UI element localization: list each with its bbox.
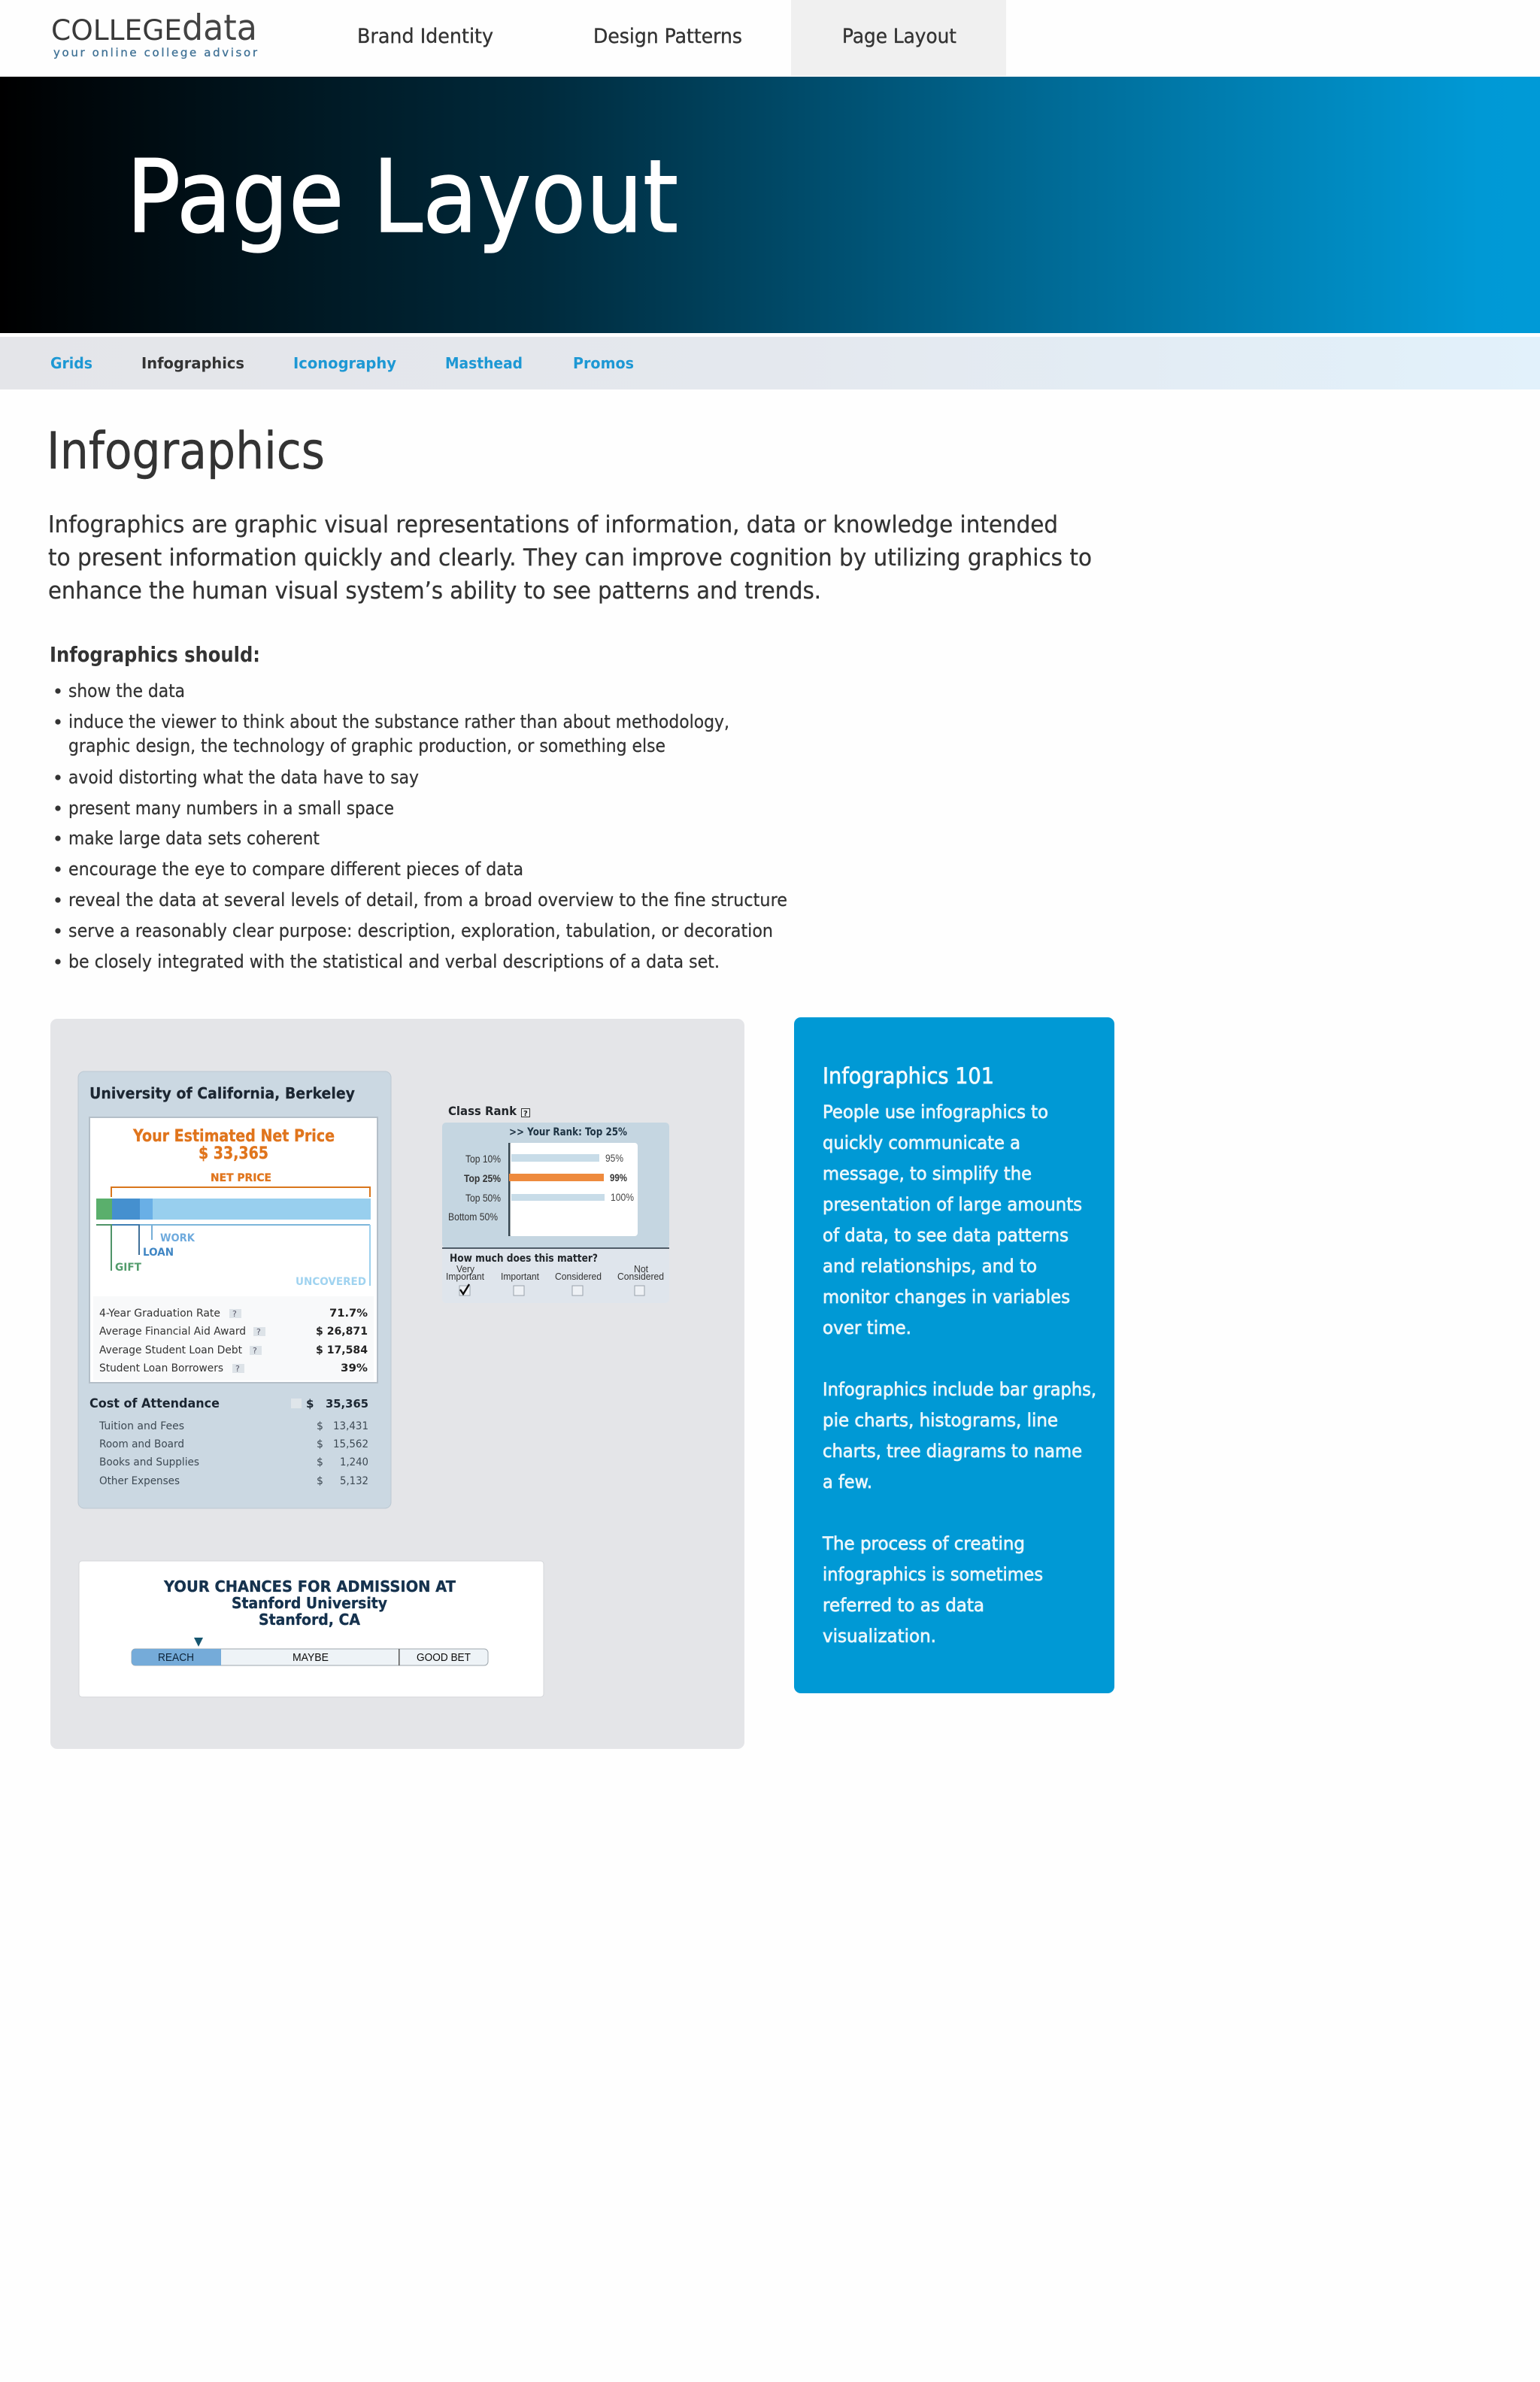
net price headline: Your Estimated Net Price: [132, 1127, 335, 1146]
logo: CollegeData: [51, 8, 258, 59]
admission heading: [163, 1577, 456, 1629]
importance selector: Considered: [555, 1271, 602, 1282]
net price white box: [89, 1117, 377, 1383]
nav item: Brand Identity: Brand Identity: [357, 25, 493, 48]
stacked cost bar: [96, 1199, 371, 1220]
statistics rows: [99, 1308, 368, 1374]
sidebar body text: a few.: [823, 1471, 872, 1493]
cost of attendance table: 1,240: [340, 1456, 368, 1468]
bullet list: present many numbers in a small space: [68, 798, 394, 819]
sidebar body text: Infographics include bar graphs,: [823, 1379, 1096, 1400]
rank labels: Top 25%: [464, 1172, 501, 1184]
statistics rows: $ 26,871: [316, 1326, 368, 1338]
importance selector: How much does this matter?: [450, 1253, 598, 1265]
sidebar heading: Infographics 101: [823, 1063, 994, 1089]
sidebar body text: [822, 1102, 1096, 1647]
sub nav link: Promos: Promos: [573, 354, 634, 372]
cost of attendance table: 35,365: [326, 1397, 368, 1411]
statistics rows: 39%: [341, 1362, 368, 1374]
cost of attendance table: $: [317, 1420, 323, 1432]
sidebar body text: quickly communicate a: [823, 1132, 1020, 1153]
cost of attendance table: $: [317, 1438, 323, 1450]
chances scale bar: GOOD BET: [417, 1651, 471, 1664]
sidebar body text: visualization.: [823, 1626, 936, 1647]
importance selector: Important: [501, 1271, 539, 1282]
help icon: [522, 1108, 529, 1118]
sub nav link: Grids: Grids: [50, 354, 92, 372]
admission heading: Stanford University: [232, 1594, 387, 1612]
admission heading: Stanford, CA: [259, 1611, 360, 1629]
statistics rows: Average Student Loan Debt: [99, 1344, 242, 1356]
sidebar body text: People use infographics to: [823, 1102, 1048, 1123]
bar labels: LOAN: [143, 1247, 174, 1259]
admission heading: YOUR CHANCES FOR ADMISSION AT: [163, 1577, 456, 1596]
intro paragraph: to present information quickly and clearly. They can improve cognition by utilizing graphics to: [48, 544, 1092, 571]
importance selector: Important: [446, 1271, 484, 1282]
hero banner: [0, 77, 1540, 333]
bullet list: encourage the eye to compare different pieces of data: [68, 859, 523, 880]
net price headline: [132, 1127, 335, 1184]
bar labels: [115, 1232, 366, 1288]
cost of attendance table: Cost of Attendance: [89, 1396, 220, 1411]
statistics rows: Average Financial Aid Award: [99, 1326, 246, 1338]
nav item: Page Layout active tab: Page Layout: [842, 25, 956, 48]
sidebar body text: and relationships, and to: [823, 1256, 1037, 1277]
sidebar body text: The process of creating: [822, 1533, 1025, 1554]
rank labels: Bottom 50%: [448, 1211, 498, 1223]
sub navigation bar: [0, 337, 1540, 389]
bar labels: UNCOVERED: [296, 1276, 366, 1288]
bullet list: make large data sets coherent: [68, 828, 320, 849]
bullet list: graphic design, the technology of graphic production, or something else: [68, 735, 665, 756]
cost of attendance table: Tuition and Fees: [99, 1420, 184, 1432]
bullet list: show the data: [68, 680, 185, 702]
pointer arrow: [194, 1638, 203, 1647]
sub nav link: Masthead: Masthead: [445, 354, 523, 372]
bar labels: GIFT: [115, 1262, 141, 1274]
sidebar body text: of data, to see data patterns: [823, 1225, 1069, 1246]
cost of attendance table: 5,132: [340, 1475, 368, 1487]
importance selector: Very: [456, 1263, 474, 1274]
chances scale bar: MAYBE: [293, 1651, 329, 1664]
intro paragraph: enhance the human visual system’s ability to see patterns and trends.: [48, 577, 821, 605]
cost of attendance table: 13,431: [333, 1420, 368, 1432]
statistics rows: ?: [235, 1364, 240, 1374]
chances scale bar: REACH: [158, 1651, 194, 1664]
logo: CollegeData: COLLEGE: [51, 14, 182, 47]
sidebar body text: monitor changes in variables: [823, 1286, 1070, 1308]
header navigation bar: [51, 0, 1006, 76]
rank bar chart: 100%: [611, 1191, 634, 1203]
intro paragraph: [48, 511, 1092, 605]
sub nav link: Infographics active: Infographics: [141, 354, 244, 372]
rank labels: Top 50%: [465, 1192, 501, 1204]
rank bar chart: 99%: [610, 1171, 627, 1183]
cost of attendance table: Room and Board: [99, 1438, 184, 1450]
panel: net price card: [78, 1071, 391, 1508]
cost of attendance table: $: [317, 1475, 323, 1487]
net price headline: NET PRICE: [211, 1172, 271, 1184]
bullet list: serve a reasonably clear purpose: description, exploration, tabulation, or decoration: [68, 920, 773, 941]
cost of attendance table: $: [306, 1397, 314, 1411]
panel: infographic examples: [50, 1019, 744, 1749]
cost of attendance table: Other Expenses: [99, 1475, 180, 1487]
sidebar body text: over time.: [823, 1317, 911, 1338]
logo: CollegeData: data: [182, 8, 257, 49]
rank bar chart: [508, 1143, 638, 1236]
sidebar body text: message, to simplify the: [823, 1163, 1032, 1184]
importance selector: [442, 1247, 669, 1303]
panel: class rank widget: [442, 1104, 669, 1303]
sidebar body text: charts, tree diagrams to name: [823, 1441, 1082, 1462]
rank title: >> Your Rank: Top 25%: [509, 1126, 627, 1138]
list heading: Infographics should:: [50, 642, 260, 667]
chances scale bar: [132, 1649, 488, 1665]
nav item: Design Patterns: Design Patterns: [593, 25, 742, 48]
sidebar body text: infographics is sometimes: [823, 1564, 1043, 1585]
bullet list: avoid distorting what the data have to say: [68, 767, 419, 788]
logo: CollegeData: your online college advisor: [53, 46, 258, 59]
nav item: Page Layout active tab: [791, 0, 1006, 76]
rank chart background: [442, 1123, 669, 1248]
bullet list: induce the viewer to think about the substance rather than about methodology,: [68, 711, 729, 732]
statistics rows: Student Loan Borrowers: [99, 1362, 223, 1374]
sub nav link: Iconography: Iconography: [293, 354, 396, 372]
importance selector: Considered: [617, 1271, 664, 1282]
card title: University of California, Berkeley: [89, 1084, 355, 1102]
net price bracket: [111, 1187, 370, 1197]
statistics rows: ?: [256, 1327, 261, 1337]
bar labels: WORK: [160, 1232, 196, 1244]
sidebar body text: presentation of large amounts: [823, 1194, 1082, 1215]
statistics rows: 4-Year Graduation Rate: [99, 1308, 220, 1320]
rank labels: Top 10%: [465, 1153, 501, 1165]
cost of attendance table: $: [317, 1456, 323, 1468]
statistics rows: 71.7%: [329, 1308, 368, 1320]
net price headline: $ 33,365: [199, 1144, 268, 1163]
intro paragraph: Infographics are graphic visual representations of information, data or knowledge intended: [48, 511, 1058, 538]
page heading: Infographics: [47, 422, 325, 481]
importance selector: Not: [634, 1263, 648, 1274]
bullet list: [56, 680, 787, 972]
statistics rows: ?: [232, 1309, 237, 1319]
cost of attendance table: [89, 1396, 368, 1487]
bar leader lines: [96, 1225, 370, 1286]
bullet list: be closely integrated with the statistical and verbal descriptions of a data set.: [68, 951, 720, 972]
sidebar body text: pie charts, histograms, line: [823, 1410, 1058, 1431]
rank bar chart: 95%: [605, 1152, 623, 1164]
panel: admission chances: [79, 1561, 544, 1697]
class rank label: Class Rank: [448, 1104, 517, 1118]
hero title: Page Layout: [126, 138, 678, 256]
statistics rows: $ 17,584: [316, 1344, 368, 1356]
bullet list: reveal the data at several levels of detail, from a broad overview to the fine structure: [68, 889, 787, 911]
cost of attendance table: 15,562: [333, 1438, 368, 1450]
sidebar body text: referred to as data: [823, 1595, 984, 1616]
statistics rows: ?: [253, 1346, 257, 1356]
panel: Infographics 101 sidebar: [794, 1017, 1114, 1693]
rank labels: [448, 1153, 501, 1223]
cost of attendance table: Books and Supplies: [99, 1456, 199, 1468]
help icon: ?: [523, 1110, 528, 1118]
